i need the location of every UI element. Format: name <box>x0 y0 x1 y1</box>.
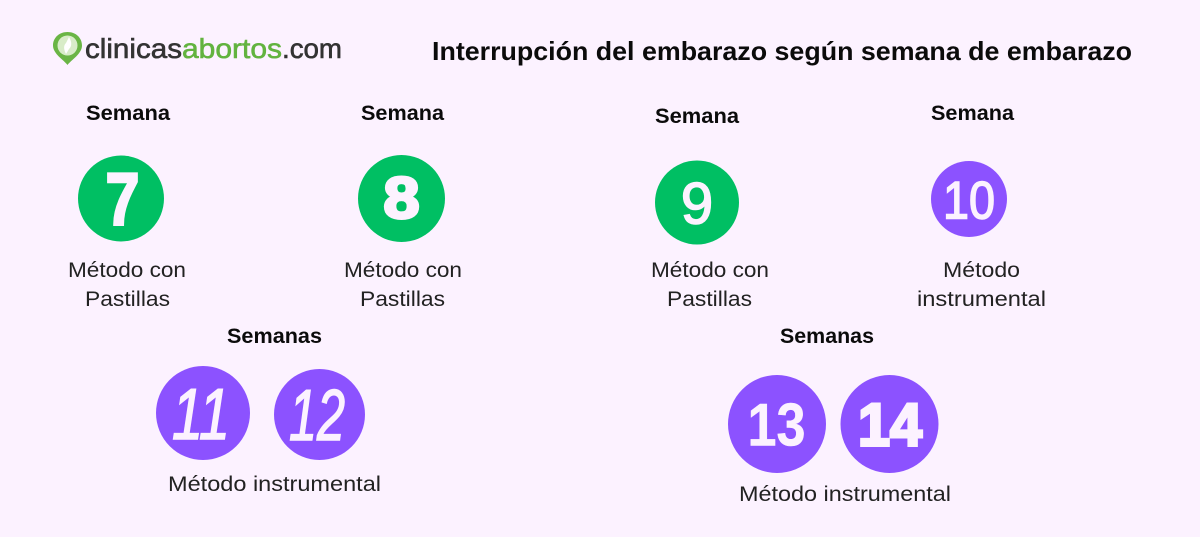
badge: 7 <box>78 156 164 242</box>
panel: week 10 <box>917 102 1046 311</box>
panel: weeks 13 and 14 <box>728 325 951 506</box>
badge: 9: 9 <box>681 172 713 236</box>
badge: 10 <box>931 161 1007 237</box>
badge: 12: 12 <box>289 376 345 456</box>
icon: green location pin <box>53 32 82 65</box>
label: instrumental method: Método instrumental <box>739 483 951 506</box>
badge: 10: 10 <box>943 172 995 230</box>
panel: week 7 <box>68 102 186 311</box>
badge: 14 <box>840 375 938 473</box>
label: method with pills <box>651 259 769 311</box>
label: method with pills: Método con <box>651 259 769 282</box>
title: Interrupción del embarazo según semana de embarazo <box>432 36 1132 66</box>
panel: week 9 <box>651 105 769 311</box>
label: method with pills: Método con <box>344 259 462 282</box>
panel: weeks 11 and 12 <box>156 325 381 496</box>
logo text: abortos <box>182 33 282 64</box>
badge: 11 <box>156 366 250 460</box>
label: method with pills: Pastillas <box>667 288 752 311</box>
heading: Semanas: Semanas <box>227 325 322 348</box>
label: method with pills: Pastillas <box>360 288 445 311</box>
logo text: clinicas <box>85 33 182 64</box>
badge: 8: 8 <box>384 166 420 231</box>
logo: clinicasabortos.com <box>53 32 342 65</box>
heading: Semana: Semana <box>86 102 170 125</box>
label: method with pills <box>68 259 186 311</box>
badge: 8 <box>358 155 445 242</box>
badge: 13: 13 <box>748 392 806 458</box>
badge: 9 <box>655 160 739 244</box>
label: method with pills <box>344 259 462 311</box>
heading: Semanas: Semanas <box>780 325 874 348</box>
badge: 7: 7 <box>106 158 140 241</box>
heading: Semana: Semana <box>931 102 1014 125</box>
heading: Semana: Semana <box>361 102 444 125</box>
label: instrumental method <box>917 259 1046 311</box>
badge: 11: 11 <box>172 375 230 455</box>
label: method with pills: Método con <box>68 259 186 282</box>
logo text: .com <box>282 33 342 64</box>
badge: 14: 14 <box>858 392 923 458</box>
label: instrumental method: Método <box>943 259 1020 282</box>
label: instrumental method: instrumental <box>917 288 1046 311</box>
label: instrumental method: Método instrumental <box>168 473 381 496</box>
panel: week 8 <box>344 102 462 311</box>
heading: Semana: Semana <box>655 105 739 128</box>
badge: 13 <box>728 375 826 473</box>
label: method with pills: Pastillas <box>85 288 170 311</box>
